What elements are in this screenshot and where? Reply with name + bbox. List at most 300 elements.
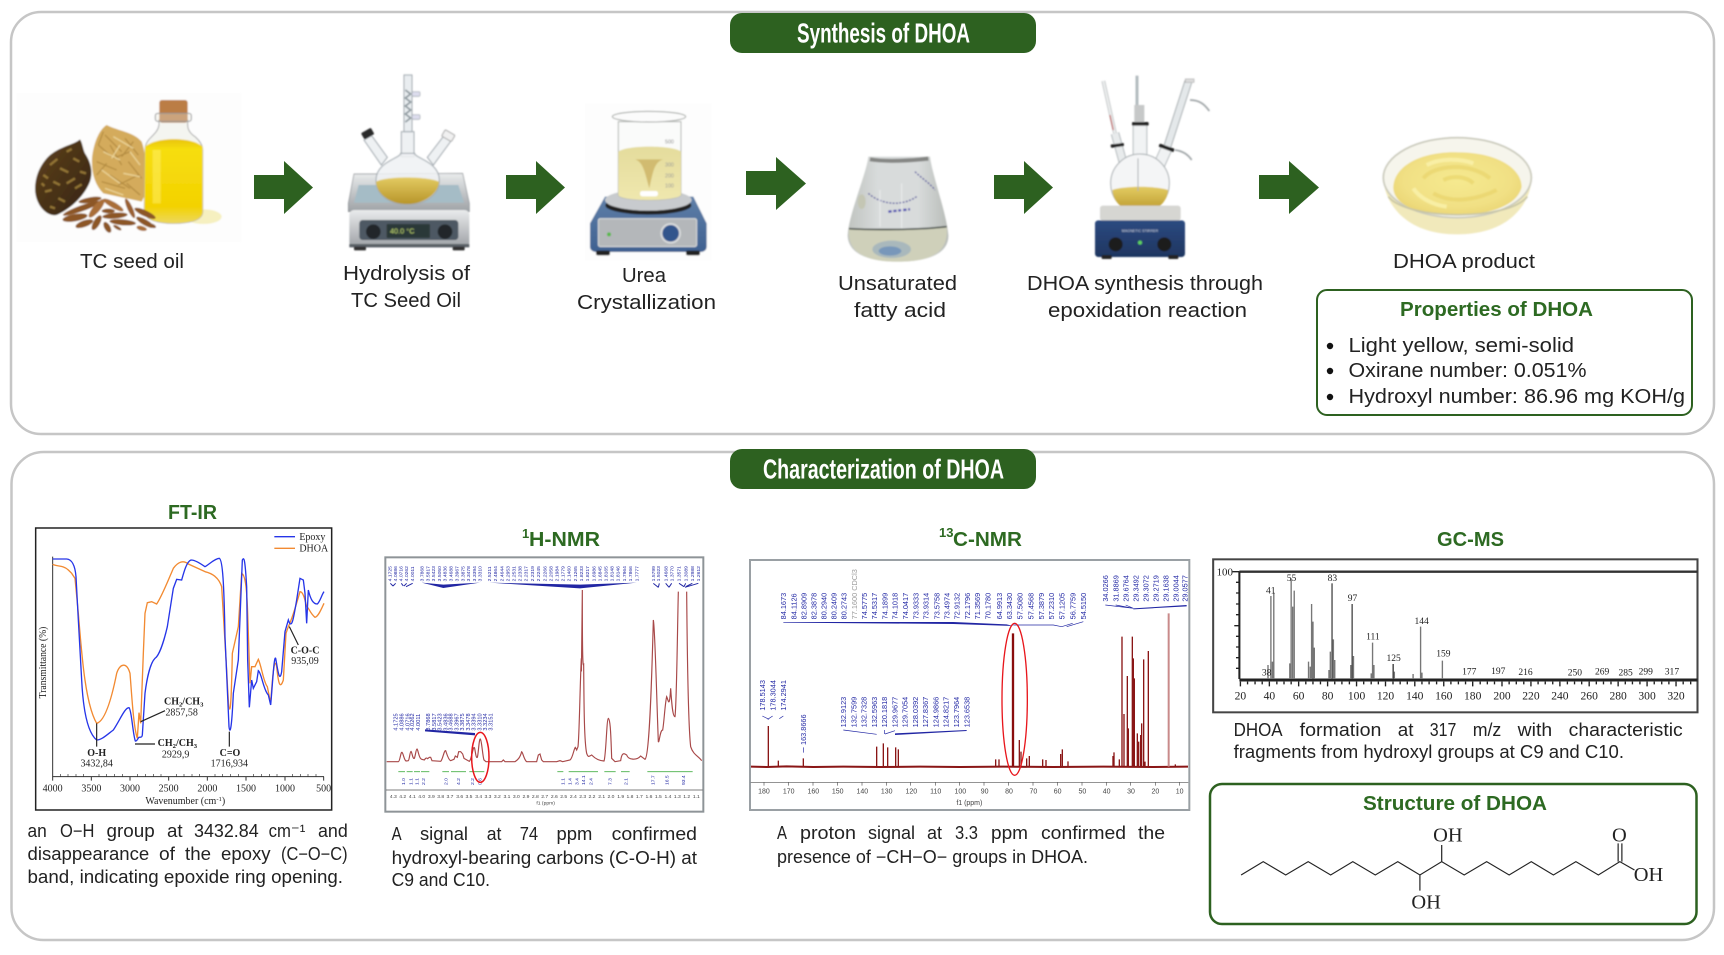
chart: 1H-NMR spectrum: 3.3394 bbox=[472, 566, 478, 581]
chart: 13C-NMR spectrum: 132.5963 bbox=[870, 697, 879, 727]
chart: 13C-NMR spectrum: 124.9866 bbox=[931, 697, 940, 727]
chart: 1H-NMR spectrum: 3.3478 bbox=[466, 566, 472, 581]
chart: GC-MS spectrum: 41 bbox=[1266, 586, 1276, 596]
chart: FT-IR spectrum: 4000 bbox=[43, 784, 63, 795]
chart: 13C-NMR spectrum: 84.1673 bbox=[779, 593, 788, 619]
chart: 13C-NMR spectrum: f1 (ppm) bbox=[956, 800, 982, 807]
chart: 1H-NMR spectrum: 4.1725 bbox=[388, 566, 394, 581]
chart: 13C-NMR spectrum: 74.1018 bbox=[891, 593, 900, 619]
chart: 1H-NMR spectrum: 4.1725 bbox=[393, 713, 399, 731]
chart: 1H-NMR spectrum: 7.3 bbox=[608, 778, 614, 785]
chart: FT-IR spectrum: Wavenumber (cm bbox=[145, 796, 216, 807]
chart: 1H-NMR spectrum: 2.5 bbox=[560, 794, 567, 800]
chart: 13C-NMR spectrum: 180 bbox=[758, 789, 770, 796]
chart: 1H-NMR spectrum: 2.0 bbox=[443, 778, 449, 785]
chart: 13C-NMR spectrum: 57.5080 bbox=[1015, 593, 1024, 619]
chart: 1H-NMR spectrum: 0.6 bbox=[478, 778, 484, 785]
chart: 1H-NMR spectrum: 2.2531 bbox=[512, 566, 518, 581]
chart: 1H-NMR spectrum: 2.1984 bbox=[554, 566, 560, 581]
text: 13C-NMR caption: the bbox=[1138, 823, 1165, 843]
chart: 1H-NMR spectrum: 1.6 bbox=[646, 794, 653, 800]
label: Urea Crystallization bbox=[577, 265, 716, 314]
chart: 13C-NMR spectrum: 74.1899 bbox=[881, 593, 890, 619]
chart: 1H-NMR spectrum: 4.1 bbox=[409, 794, 416, 800]
chart: FT-IR spectrum: 3 bbox=[200, 701, 204, 708]
chart: 13C-NMR spectrum: 29.6764 bbox=[1121, 575, 1130, 602]
icon: beaker on magnetic stirrer: 300 bbox=[665, 163, 674, 169]
chart: GC-MS spectrum: 125 bbox=[1387, 654, 1401, 664]
label: DHOA product: DHOA product bbox=[1393, 251, 1535, 273]
heading: Synthesis of DHOA: Synthesis of DHOA bbox=[797, 18, 970, 48]
chart: 1H-NMR spectrum: 1.6986 bbox=[591, 566, 597, 581]
text: GC-MS caption: at bbox=[1398, 720, 1414, 740]
chart: FT-IR spectrum: /CH bbox=[175, 738, 194, 749]
chart: GC-MS spectrum: 160 bbox=[1435, 690, 1453, 702]
chart: 1H-NMR spectrum: 1.8165 bbox=[604, 566, 610, 581]
text: 1H-NMR caption: confirmed bbox=[612, 824, 697, 844]
chart: 1H-NMR spectrum: 3.5423 bbox=[431, 566, 437, 581]
chart: 1H-NMR spectrum: 3.3310 bbox=[478, 713, 484, 731]
chart: 1H-NMR spectrum: 1.5023 bbox=[656, 566, 662, 581]
label: Unsaturated fatty acid bbox=[838, 273, 957, 322]
chart: 1H-NMR spectrum: 1.5 bbox=[655, 794, 662, 800]
chart: GC-MS spectrum: 197 bbox=[1491, 667, 1506, 677]
label: Urea Crystallization: Urea bbox=[622, 265, 667, 287]
chart: 1H-NMR spectrum: 2.2317 bbox=[524, 566, 530, 581]
chart: FT-IR spectrum: C=O bbox=[220, 748, 241, 759]
diagram: DHOA molecular structure: OH bbox=[1433, 825, 1463, 847]
chart: 13C-NMR spectrum: 29.2719 bbox=[1151, 575, 1160, 602]
chart: 1H-NMR spectrum: 2.2319 bbox=[530, 566, 536, 581]
text: GC-MS caption: m/z bbox=[1473, 720, 1501, 740]
chart: 1H-NMR spectrum: 1.2 bbox=[683, 794, 690, 800]
text: GC-MS caption: with bbox=[1517, 720, 1552, 740]
chart: 13C-NMR spectrum: 124.8217 bbox=[942, 697, 951, 727]
chart: 1H-NMR spectrum: 4.0262 bbox=[410, 713, 416, 731]
icon: beaker on magnetic stirrer bbox=[585, 103, 712, 261]
chart: GC-MS spectrum: 180 bbox=[1464, 690, 1482, 702]
chart: 1H-NMR spectrum: 1.2612 bbox=[696, 566, 702, 581]
chart: 13C-NMR spectrum: 150 bbox=[832, 789, 844, 796]
text: 13C-NMR caption: confirmed bbox=[1041, 823, 1126, 843]
chart: 1H-NMR spectrum: 1.4668 bbox=[663, 566, 669, 581]
chart: 13C-NMR spectrum: 82.3878 bbox=[810, 593, 819, 619]
chart: 13C-NMR spectrum: 128.0392 bbox=[911, 697, 920, 727]
arrow 4 bbox=[994, 161, 1053, 214]
chart: 1H-NMR spectrum: 1.3571 bbox=[677, 566, 683, 581]
chart: 1H-NMR spectrum: 1.1 bbox=[693, 794, 700, 800]
chart: 13C-NMR spectrum: 123.6538 bbox=[962, 697, 971, 727]
chart: 1H-NMR spectrum: 2.1779 bbox=[561, 566, 567, 581]
chart: 1H-NMR spectrum: 2.9 bbox=[523, 794, 530, 800]
chart: FT-IR spectrum: 3000 bbox=[120, 784, 140, 795]
chart: 13C-NMR spectrum: 132.9123 bbox=[839, 697, 848, 727]
chart: 13C-NMR spectrum: 73.4974 bbox=[942, 593, 951, 619]
chart: GC-MS spectrum: 111 bbox=[1366, 632, 1380, 642]
list: properties bbox=[1327, 335, 1685, 408]
chart: GC-MS spectrum: 317 bbox=[1665, 667, 1679, 677]
chart: 1H-NMR spectrum: 1.1 bbox=[561, 778, 567, 785]
chart: 1H-NMR spectrum: 1.5799 bbox=[651, 566, 657, 581]
chart: 13C-NMR spectrum: 54.5150 bbox=[1079, 593, 1088, 619]
chart: FT-IR spectrum: 2 bbox=[173, 743, 177, 750]
chart: 13C-NMR spectrum: 90 bbox=[981, 789, 989, 796]
chart: 13C-NMR spectrum: 80.2409 bbox=[830, 593, 839, 619]
chart: 1H-NMR spectrum: 4.0262 bbox=[404, 566, 410, 581]
chart: 1H-NMR spectrum: 93.4 bbox=[681, 775, 687, 785]
text: FT-IR caption: O−H bbox=[60, 821, 94, 841]
chart: 13C-NMR spectrum: 30 bbox=[1127, 789, 1135, 796]
chart: 1H-NMR spectrum: 3.6 bbox=[456, 794, 463, 800]
list: properties: Oxirane number: 0.051% bbox=[1348, 360, 1587, 382]
chart: 13C-NMR spectrum: 70.1780 bbox=[983, 593, 992, 619]
chart: FT-IR spectrum bbox=[36, 528, 332, 810]
chart: FT-IR spectrum: 3432,84 bbox=[80, 759, 113, 770]
chart: 13C-NMR spectrum: 84.1126 bbox=[789, 593, 798, 619]
chart: FT-IR spectrum: 500 bbox=[316, 784, 331, 795]
chart: 13C-NMR spectrum: 80.2743 bbox=[840, 593, 849, 619]
icon: beaker on magnetic stirrer: 100 bbox=[665, 184, 674, 190]
chart: FT-IR spectrum: 2929,9 bbox=[162, 749, 189, 760]
chart: 1H-NMR spectrum: 3.3394 bbox=[472, 713, 478, 731]
icon: TC seed oil photo bbox=[17, 93, 242, 242]
chart: 13C-NMR spectrum: 77.1600 CDCl3 bbox=[850, 569, 859, 619]
diagram: DHOA molecular structure: OH bbox=[1634, 864, 1663, 886]
chart: GC-MS spectrum: 140 bbox=[1406, 690, 1424, 702]
icon: beaker on magnetic stirrer: 200 bbox=[665, 174, 674, 180]
label: DHOA synthesis through epoxidation reaction: DHOA synthesis through bbox=[1027, 273, 1263, 295]
chart: 1H-NMR spectrum: 2.5211 bbox=[487, 566, 493, 581]
text: 13C-NMR caption: proton bbox=[800, 823, 856, 843]
chart: 1H-NMR spectrum: 1.7777 bbox=[634, 566, 640, 581]
heading: 1H-NMR: 1 bbox=[522, 526, 529, 541]
chart: 13C-NMR spectrum: 64.9913 bbox=[995, 593, 1004, 619]
chart: 13C-NMR spectrum: 170 bbox=[783, 789, 795, 796]
chart: 1H-NMR spectrum: 3.5 bbox=[466, 794, 473, 800]
chart: 13C-NMR spectrum: 56.7759 bbox=[1068, 593, 1077, 619]
chart: 1H-NMR spectrum: 3.7868 bbox=[426, 713, 432, 731]
chart: 1H-NMR spectrum: 3.4688 bbox=[449, 566, 455, 581]
chart: 1H-NMR spectrum: 2.1 bbox=[598, 794, 605, 800]
heading: 13C-NMR bbox=[939, 525, 1023, 551]
chart: FT-IR spectrum: /CH bbox=[181, 696, 200, 707]
chart: 1H-NMR spectrum: 2.8 bbox=[532, 794, 539, 800]
chart: 13C-NMR spectrum: 82.8909 bbox=[800, 593, 809, 619]
chart: 1H-NMR spectrum: 3.4836 bbox=[443, 713, 449, 731]
icon: bowl of DHOA product bbox=[1383, 138, 1532, 234]
chart: 1H-NMR spectrum: 3.4 bbox=[475, 794, 482, 800]
chart: 1H-NMR spectrum: 2.2338 bbox=[518, 566, 524, 581]
chart: 1H-NMR spectrum: 1.3 bbox=[674, 794, 681, 800]
chart: 1H-NMR spectrum: 3.3967 bbox=[454, 713, 460, 731]
chart: FT-IR spectrum: O-H bbox=[87, 748, 106, 759]
text: 1H-NMR caption: signal bbox=[420, 824, 468, 844]
text: 1H-NMR caption: C9 and C10. bbox=[392, 870, 490, 890]
chart: 1H-NMR spectrum: 2.2953 bbox=[505, 566, 511, 581]
chart: 1H-NMR spectrum: 3.5423 bbox=[438, 713, 444, 731]
chart: 1H-NMR spectrum: 3.1 bbox=[504, 794, 511, 800]
text: FT-IR caption: an bbox=[28, 821, 47, 841]
chart: 13C-NMR spectrum: 29.0577 bbox=[1181, 575, 1190, 602]
chart: GC-MS spectrum: 216 bbox=[1518, 668, 1533, 678]
text: 1H-NMR caption: A bbox=[392, 824, 402, 844]
chart: 1H-NMR spectrum: 4.0716 bbox=[405, 713, 411, 731]
chart: 1H-NMR spectrum: 4.2 bbox=[456, 778, 462, 785]
chart: 13C-NMR spectrum: 140 bbox=[857, 789, 868, 796]
icon: epoxidation reaction apparatus: MAGNETIC STIRRER bbox=[1122, 229, 1159, 233]
label: DHOA synthesis through epoxidation reaction: epoxidation reaction bbox=[1048, 300, 1247, 322]
chart: 1H-NMR spectrum: 4.0886 bbox=[399, 713, 405, 731]
chart: 1H-NMR spectrum: 1.3770 bbox=[669, 566, 675, 581]
chart: GC-MS spectrum: 240 bbox=[1551, 690, 1569, 702]
chart: 13C-NMR spectrum: 80 bbox=[1005, 789, 1013, 796]
chart: 1H-NMR spectrum: 2.2 bbox=[470, 778, 476, 785]
chart: GC-MS spectrum: 38 bbox=[1262, 669, 1272, 679]
chart: FT-IR spectrum: 2500 bbox=[159, 784, 179, 795]
diagram: DHOA molecular structure bbox=[1241, 825, 1663, 913]
chart: 13C-NMR spectrum: 73.9314 bbox=[922, 593, 931, 619]
chart: 13C-NMR spectrum: 57.2310 bbox=[1047, 593, 1056, 619]
chart: 13C-NMR spectrum: 72.9132 bbox=[953, 593, 962, 619]
text: 13C-NMR caption: presence of −CH−O− groups in DHOA. bbox=[777, 847, 1088, 867]
chart: 13C-NMR spectrum: 60 bbox=[1054, 789, 1062, 796]
heading: Characterization of DHOA: Characterization of DHOA bbox=[763, 454, 1004, 484]
chart: 13C-NMR spectrum: 178.5143 bbox=[758, 680, 767, 711]
chart: 1H-NMR spectrum bbox=[385, 557, 703, 812]
chart: FT-IR spectrum: Transmittance (%) bbox=[38, 627, 49, 698]
panel: characterization of DHOA bbox=[12, 452, 1714, 940]
text: GC-MS caption: formation bbox=[1300, 720, 1381, 740]
label: Unsaturated fatty acid: fatty acid bbox=[854, 300, 946, 322]
chart: FT-IR spectrum: 3 bbox=[194, 743, 198, 750]
chart: 1H-NMR spectrum: 4.0 bbox=[418, 794, 425, 800]
chart: FT-IR spectrum: ) bbox=[222, 796, 225, 807]
chart: 13C-NMR spectrum: 100 bbox=[955, 789, 966, 796]
chart: GC-MS spectrum: 60 bbox=[1293, 690, 1305, 702]
chart: 1H-NMR spectrum: 3.7868 bbox=[419, 566, 425, 581]
chart: 1H-NMR spectrum: 2.6 bbox=[551, 794, 558, 800]
chart: 13C-NMR spectrum: 40 bbox=[1103, 789, 1111, 796]
chart: 1H-NMR spectrum: 3.5817 bbox=[425, 566, 431, 581]
chart: 1H-NMR spectrum: 1.7964 bbox=[622, 566, 628, 581]
diagram: DHOA molecular structure: OH bbox=[1411, 892, 1441, 913]
label: TC seed oil: TC seed oil bbox=[80, 251, 184, 273]
chart: 13C-NMR spectrum: 73.9333 bbox=[911, 593, 920, 619]
chart: GC-MS spectrum: 159 bbox=[1436, 650, 1451, 660]
chart: 13C-NMR spectrum: 110 bbox=[930, 789, 941, 796]
chart: 13C-NMR spectrum: 10 bbox=[1176, 789, 1184, 796]
label: Hydrolysis of TC Seed Oil: TC Seed Oil bbox=[351, 290, 461, 312]
chart: FT-IR spectrum: 2000 bbox=[197, 784, 217, 795]
chart: FT-IR spectrum: -1 bbox=[216, 796, 222, 803]
chart: 1H-NMR spectrum: 2.4864 bbox=[493, 566, 499, 581]
chart: 13C-NMR spectrum: 29.3492 bbox=[1131, 575, 1140, 602]
chart: 1H-NMR spectrum: 1.8233 bbox=[579, 566, 585, 581]
chart: 1H-NMR spectrum: 2.2 bbox=[589, 794, 596, 800]
text: 13C-NMR caption: signal bbox=[868, 823, 915, 843]
chart: 13C-NMR spectrum: 71.3569 bbox=[973, 593, 982, 619]
text: FT-IR caption: epoxy bbox=[221, 844, 271, 864]
chart: 13C-NMR spectrum: 120.1818 bbox=[880, 697, 889, 727]
chart: 1H-NMR spectrum: 1.6845 bbox=[597, 566, 603, 581]
chart: GC-MS spectrum: 200 bbox=[1493, 690, 1511, 702]
chart: 1H-NMR spectrum: 2.0 bbox=[608, 794, 615, 800]
chart: GC-MS spectrum: 280 bbox=[1609, 690, 1627, 702]
chart: FT-IR spectrum: CH bbox=[164, 696, 179, 707]
chart: FT-IR spectrum: 2857,58 bbox=[165, 708, 198, 719]
text: 1H-NMR caption: hydroxyl-bearing carbons (C-O-H) at bbox=[392, 848, 697, 868]
chart: 1H-NMR spectrum: 1.4 bbox=[665, 794, 672, 800]
label: Hydrolysis of TC Seed Oil bbox=[343, 263, 470, 312]
diagram: DHOA molecular structure: O bbox=[1612, 825, 1627, 847]
chart: 13C-NMR spectrum: 160 bbox=[808, 789, 819, 796]
chart: 1H-NMR spectrum: 1.0 bbox=[401, 778, 407, 785]
chart: 1H-NMR spectrum: 2.4 bbox=[588, 778, 594, 785]
arrow 5 bbox=[1259, 161, 1319, 214]
chart: 13C-NMR spectrum: 74.0417 bbox=[901, 593, 910, 619]
panel: properties of DHOA bbox=[1317, 290, 1692, 415]
chart: 1H-NMR spectrum: 17.7 bbox=[650, 775, 656, 785]
chart: 1H-NMR spectrum: 3.3 bbox=[485, 794, 492, 800]
icon: epoxidation reaction apparatus bbox=[1095, 76, 1209, 259]
text: 13C-NMR caption: A bbox=[777, 823, 787, 843]
chart: 1H-NMR spectrum: 1.3089 bbox=[683, 566, 689, 581]
chart: 1H-NMR spectrum: 2.2245 bbox=[536, 566, 542, 581]
label: DHOA synthesis through epoxidation reaction bbox=[1027, 273, 1263, 322]
chart: FT-IR spectrum: 935,09 bbox=[291, 656, 319, 667]
chart: 1H-NMR spectrum: 3.2 bbox=[494, 794, 501, 800]
chart: 1H-NMR spectrum: 3.9 bbox=[428, 794, 435, 800]
text: 1H-NMR caption: at bbox=[487, 824, 501, 844]
chart: GC-MS spectrum: 250 bbox=[1568, 669, 1582, 679]
chart: GC-MS spectrum: 320 bbox=[1667, 690, 1685, 702]
chart: 1H-NMR spectrum: 3.3967 bbox=[454, 566, 460, 581]
chart: 1H-NMR spectrum: 3.5050 bbox=[437, 566, 443, 581]
chart: 13C-NMR spectrum: 74.5775 bbox=[860, 593, 869, 619]
chart: 13C-NMR spectrum: 129.9677 bbox=[890, 697, 899, 727]
chart: 1H-NMR spectrum: 1.8148 bbox=[610, 566, 616, 581]
chart: FT-IR spectrum: 3500 bbox=[81, 784, 101, 795]
label: Unsaturated fatty acid: Unsaturated bbox=[838, 273, 957, 295]
chart: 1H-NMR spectrum: 3.4688 bbox=[449, 713, 455, 731]
chart: 1H-NMR spectrum: 1.2988 bbox=[690, 566, 696, 581]
chart: FT-IR spectrum: CH bbox=[158, 738, 173, 749]
chart: 13C-NMR spectrum: 132.7328 bbox=[860, 697, 869, 727]
chart: GC-MS spectrum: 120 bbox=[1377, 690, 1394, 702]
arrow 3 bbox=[746, 157, 806, 210]
chart: 1H-NMR spectrum: 3.7 bbox=[447, 794, 454, 800]
chart: 13C-NMR spectrum: 29.0044 bbox=[1172, 575, 1181, 602]
chart: 13C-NMR spectrum: 57.3879 bbox=[1037, 593, 1046, 619]
chart: GC-MS spectrum: 299 bbox=[1639, 667, 1653, 677]
chart: GC-MS spectrum: 144 bbox=[1414, 617, 1429, 627]
chart: GC-MS spectrum: 97 bbox=[1348, 594, 1358, 604]
chart: 1H-NMR spectrum: 2.2266 bbox=[542, 566, 548, 581]
chart: GC-MS spectrum: 177 bbox=[1462, 667, 1477, 677]
chart: 1H-NMR spectrum: 14.1 bbox=[581, 775, 587, 785]
chart: FT-IR spectrum: 1500 bbox=[236, 784, 256, 795]
chart: 13C-NMR spectrum: 80.2940 bbox=[820, 593, 829, 619]
list: properties: Light yellow, semi-solid bbox=[1348, 335, 1574, 357]
chart: 1H-NMR spectrum: 2.2 bbox=[421, 778, 427, 785]
chart: FT-IR spectrum: 1000 bbox=[275, 784, 295, 795]
chart: 1H-NMR spectrum: 4.2 bbox=[399, 794, 406, 800]
chart: 1H-NMR spectrum: 3.3478 bbox=[466, 713, 472, 731]
text: FT-IR caption: band, indicating epoxide ring opening. bbox=[28, 867, 343, 887]
chart: 13C-NMR spectrum bbox=[750, 560, 1190, 810]
chart: 1H-NMR spectrum: 3.3875 bbox=[460, 566, 466, 581]
text: FT-IR caption: cm⁻¹ bbox=[269, 821, 305, 841]
text: FT-IR caption: disappearance bbox=[28, 844, 149, 864]
list: properties: Hydroxyl number: 86.96 mg KOH/g bbox=[1348, 386, 1685, 408]
heading: Characterization of DHOA bbox=[730, 449, 1036, 489]
chart: 1H-NMR spectrum: 16.5 bbox=[664, 775, 670, 785]
chart: FT-IR spectrum: DHOA bbox=[299, 543, 329, 554]
chart: 13C-NMR spectrum: 129.7054 bbox=[901, 697, 910, 727]
text: 1H-NMR caption: ppm bbox=[556, 824, 592, 844]
chart: 1H-NMR spectrum: 3.5817 bbox=[432, 713, 438, 731]
chart: 13C-NMR spectrum: 29.1638 bbox=[1161, 575, 1170, 602]
text: 13C-NMR caption: ppm bbox=[991, 823, 1028, 843]
chart: FT-IR spectrum: 2 bbox=[179, 701, 183, 708]
text: GC-MS caption: 317 bbox=[1430, 720, 1456, 740]
icon: hydrolysis apparatus: 40.0 °C bbox=[390, 227, 415, 236]
chart: GC-MS spectrum: 100 bbox=[1217, 566, 1233, 578]
chart: 1H-NMR spectrum: 4.0886 bbox=[393, 566, 399, 581]
chart: 13C-NMR spectrum: 123.7964 bbox=[952, 697, 961, 727]
heading: Properties of DHOA: Properties of DHOA bbox=[1400, 299, 1593, 321]
chart: 1H-NMR spectrum: 1.9 bbox=[617, 794, 624, 800]
text: FT-IR caption: at bbox=[167, 821, 183, 841]
chart: 1H-NMR spectrum: 3.3234 bbox=[483, 713, 489, 731]
chart: 1H-NMR spectrum: 3.4836 bbox=[443, 566, 449, 581]
text: FT-IR caption: (C−O−C) bbox=[281, 844, 348, 864]
chart: 1H-NMR spectrum: 4.3 bbox=[390, 794, 397, 800]
chart: 13C-NMR spectrum: 57.1205 bbox=[1058, 593, 1067, 619]
heading: 13C-NMR: 13 bbox=[939, 525, 953, 540]
chart: 13C-NMR spectrum: 178.3044 bbox=[768, 680, 777, 711]
arrow 2 bbox=[506, 161, 565, 214]
chart: 13C-NMR spectrum: 174.2941 bbox=[779, 680, 788, 711]
heading: GC-MS: GC-MS bbox=[1437, 529, 1504, 551]
chart: 1H-NMR spectrum: 2.4644 bbox=[499, 566, 505, 581]
chart: 13C-NMR spectrum: 120 bbox=[906, 789, 917, 796]
heading: 1H-NMR: H-NMR bbox=[529, 529, 601, 551]
panel: synthesis of DHOA bbox=[11, 12, 1714, 434]
chart: 13C-NMR spectrum: 72.1796 bbox=[963, 593, 972, 619]
chart: 13C-NMR spectrum: 70 bbox=[1029, 789, 1037, 796]
chart: 1H-NMR spectrum: 1.8 bbox=[627, 794, 634, 800]
chart: GC-MS spectrum: 285 bbox=[1618, 669, 1633, 679]
chart: 1H-NMR spectrum: 4.0716 bbox=[399, 566, 405, 581]
text: 13C-NMR caption: 3.3 bbox=[955, 823, 978, 843]
chart: GC-MS spectrum: 220 bbox=[1522, 690, 1540, 702]
chart: 13C-NMR spectrum: 63.3430 bbox=[1005, 593, 1014, 619]
chart: FT-IR spectrum: Epoxy bbox=[299, 532, 325, 543]
text: FT-IR caption: of bbox=[159, 844, 176, 864]
chart: 13C-NMR spectrum: 31.8869 bbox=[1111, 575, 1120, 602]
chart: 1H-NMR spectrum: 3.3151 bbox=[488, 713, 494, 731]
chart: 1H-NMR spectrum: 3.3875 bbox=[460, 713, 466, 731]
chart: 1H-NMR spectrum: 2.7 bbox=[541, 794, 548, 800]
chart: FT-IR spectrum: C-O-C bbox=[291, 645, 319, 656]
text: FT-IR caption: the bbox=[185, 844, 211, 864]
arrow 1 bbox=[254, 161, 313, 214]
chart: 13C-NMR spectrum: 73.5758 bbox=[932, 593, 941, 619]
chart: GC-MS spectrum: 80 bbox=[1322, 690, 1334, 702]
chart: 1H-NMR spectrum: 1.7 bbox=[636, 794, 643, 800]
chart: 1H-NMR spectrum: 1.1 bbox=[414, 778, 420, 785]
